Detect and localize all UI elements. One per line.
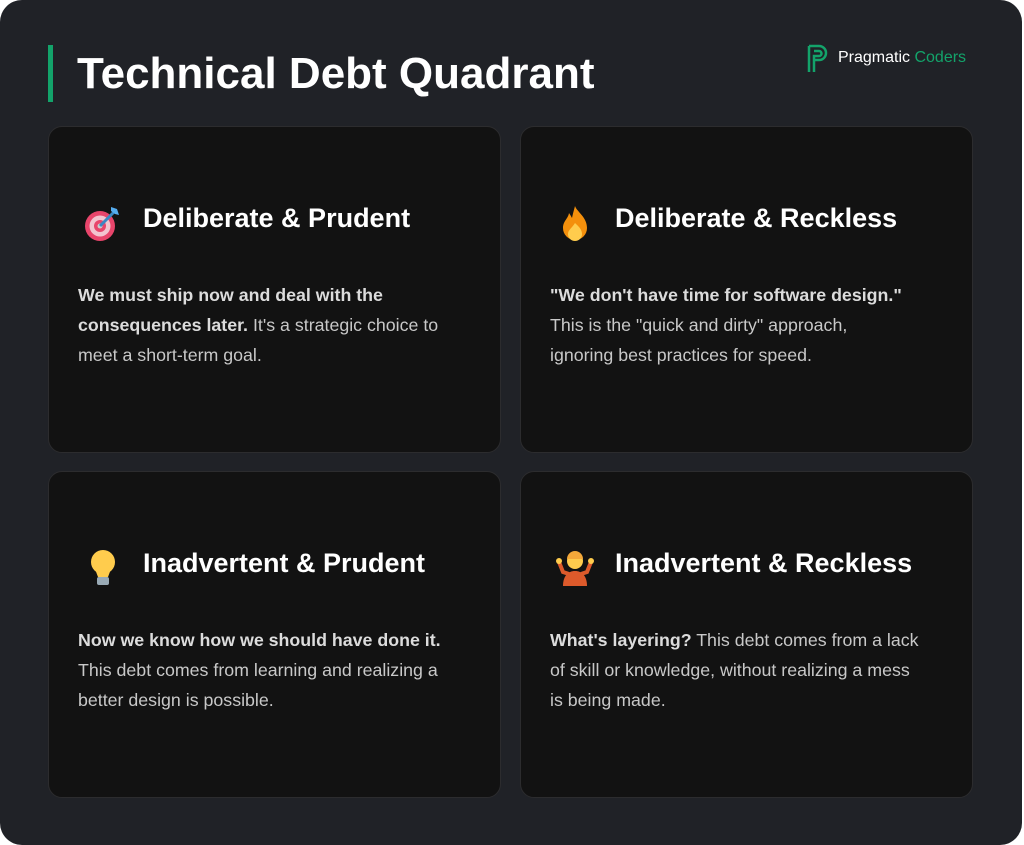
text: of skill or knowledge, without realizing a mess <box>550 660 910 680</box>
panel: inadvertent prudent <box>48 471 501 798</box>
panel: inadvertent reckless <box>520 471 973 798</box>
text: This debt comes from learning and realizing a <box>78 660 438 680</box>
text: ignoring best practices for speed. <box>550 345 812 365</box>
text: We must ship now and deal with the <box>78 285 383 305</box>
title: Technical Debt Quadrant <box>77 49 594 98</box>
text: better design is possible. <box>78 690 274 710</box>
text <box>550 630 919 710</box>
text: Now we know how we should have done it. <box>78 630 441 650</box>
icon: light bulb <box>91 550 115 585</box>
text: What's layering? This debt comes from a lack <box>550 630 919 650</box>
logo: Pragmatic Coders: Pragmatic Coders <box>838 49 966 66</box>
text: "We don't have time for software design." <box>550 285 902 305</box>
text: is being made. <box>550 690 666 710</box>
text: This is the "quick and dirty" approach, <box>550 315 847 335</box>
text <box>78 285 438 365</box>
text <box>550 285 902 365</box>
icon: shrugging person <box>556 551 594 586</box>
panel: deliberate prudent <box>48 126 501 453</box>
icon: target <box>85 207 119 241</box>
heading: Inadvertent & Reckless <box>615 548 912 578</box>
icon: fire <box>563 206 587 241</box>
text: consequences later. It's a strategic choice to <box>78 315 438 335</box>
accent bar <box>48 45 53 102</box>
text: meet a short-term goal. <box>78 345 262 365</box>
text <box>78 630 441 710</box>
heading: Deliberate & Prudent <box>143 203 410 233</box>
heading: Deliberate & Reckless <box>615 203 897 233</box>
panel: deliberate reckless <box>520 126 973 453</box>
heading: Inadvertent & Prudent <box>143 548 425 578</box>
logo: Pragmatic Coders <box>808 44 966 72</box>
